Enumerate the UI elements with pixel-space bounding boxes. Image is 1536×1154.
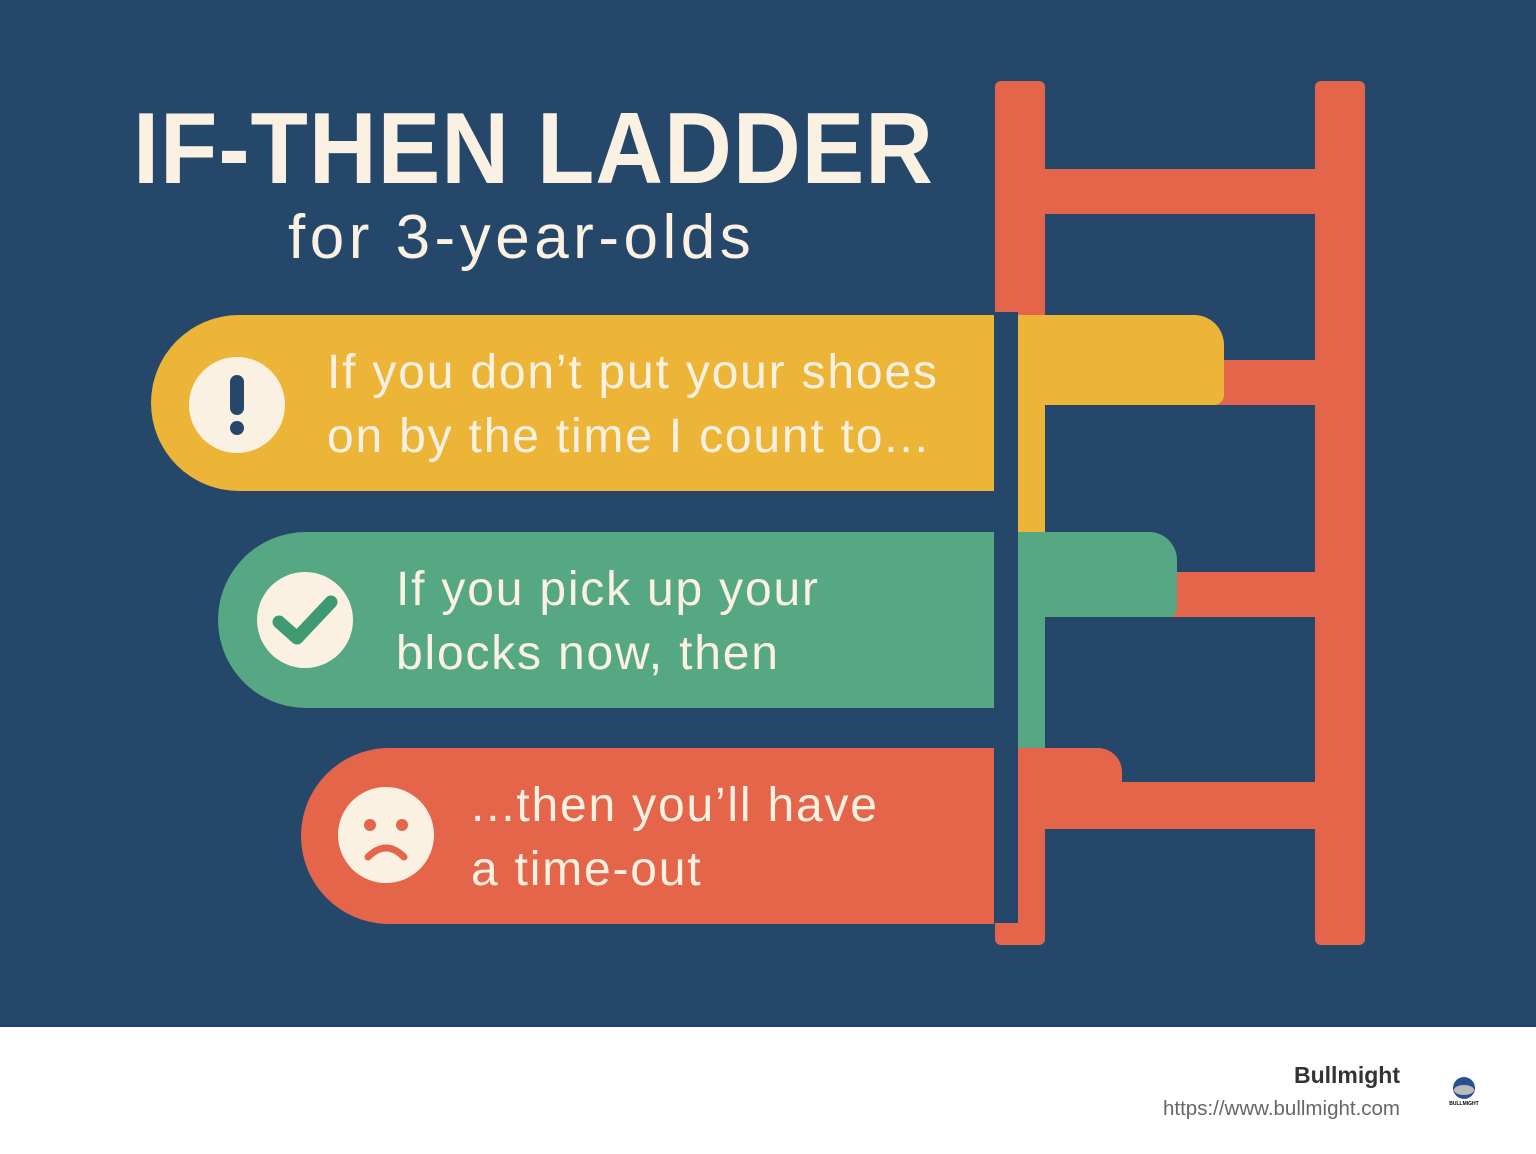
panel: red — [301, 748, 994, 924]
text — [471, 779, 879, 896]
icon: logo — [1449, 1077, 1479, 1106]
red connector — [1018, 748, 1122, 829]
icon: check — [257, 572, 353, 668]
yellow connector — [1018, 315, 1224, 405]
subtitle: for 3-year-olds — [288, 203, 755, 272]
title: IF-THEN LADDER — [133, 93, 934, 205]
text: If you pick up your — [396, 563, 820, 616]
footer brand — [1163, 1062, 1400, 1120]
text: blocks now, then — [396, 627, 780, 680]
footer brand: https://www.bullmight.com — [1163, 1097, 1400, 1120]
green connector — [1018, 532, 1177, 617]
icon: sad face — [338, 787, 434, 883]
text: ...then you’ll have — [471, 779, 879, 832]
text: on by the time I count to... — [327, 410, 930, 463]
text: If you don’t put your shoes — [327, 346, 939, 399]
text — [327, 346, 939, 463]
panel: green — [218, 532, 994, 708]
text: a time-out — [471, 843, 702, 896]
footer brand: Bullmight — [1294, 1062, 1400, 1088]
text — [396, 563, 820, 680]
icon: exclamation — [189, 357, 285, 453]
panel: yellow — [151, 315, 994, 491]
